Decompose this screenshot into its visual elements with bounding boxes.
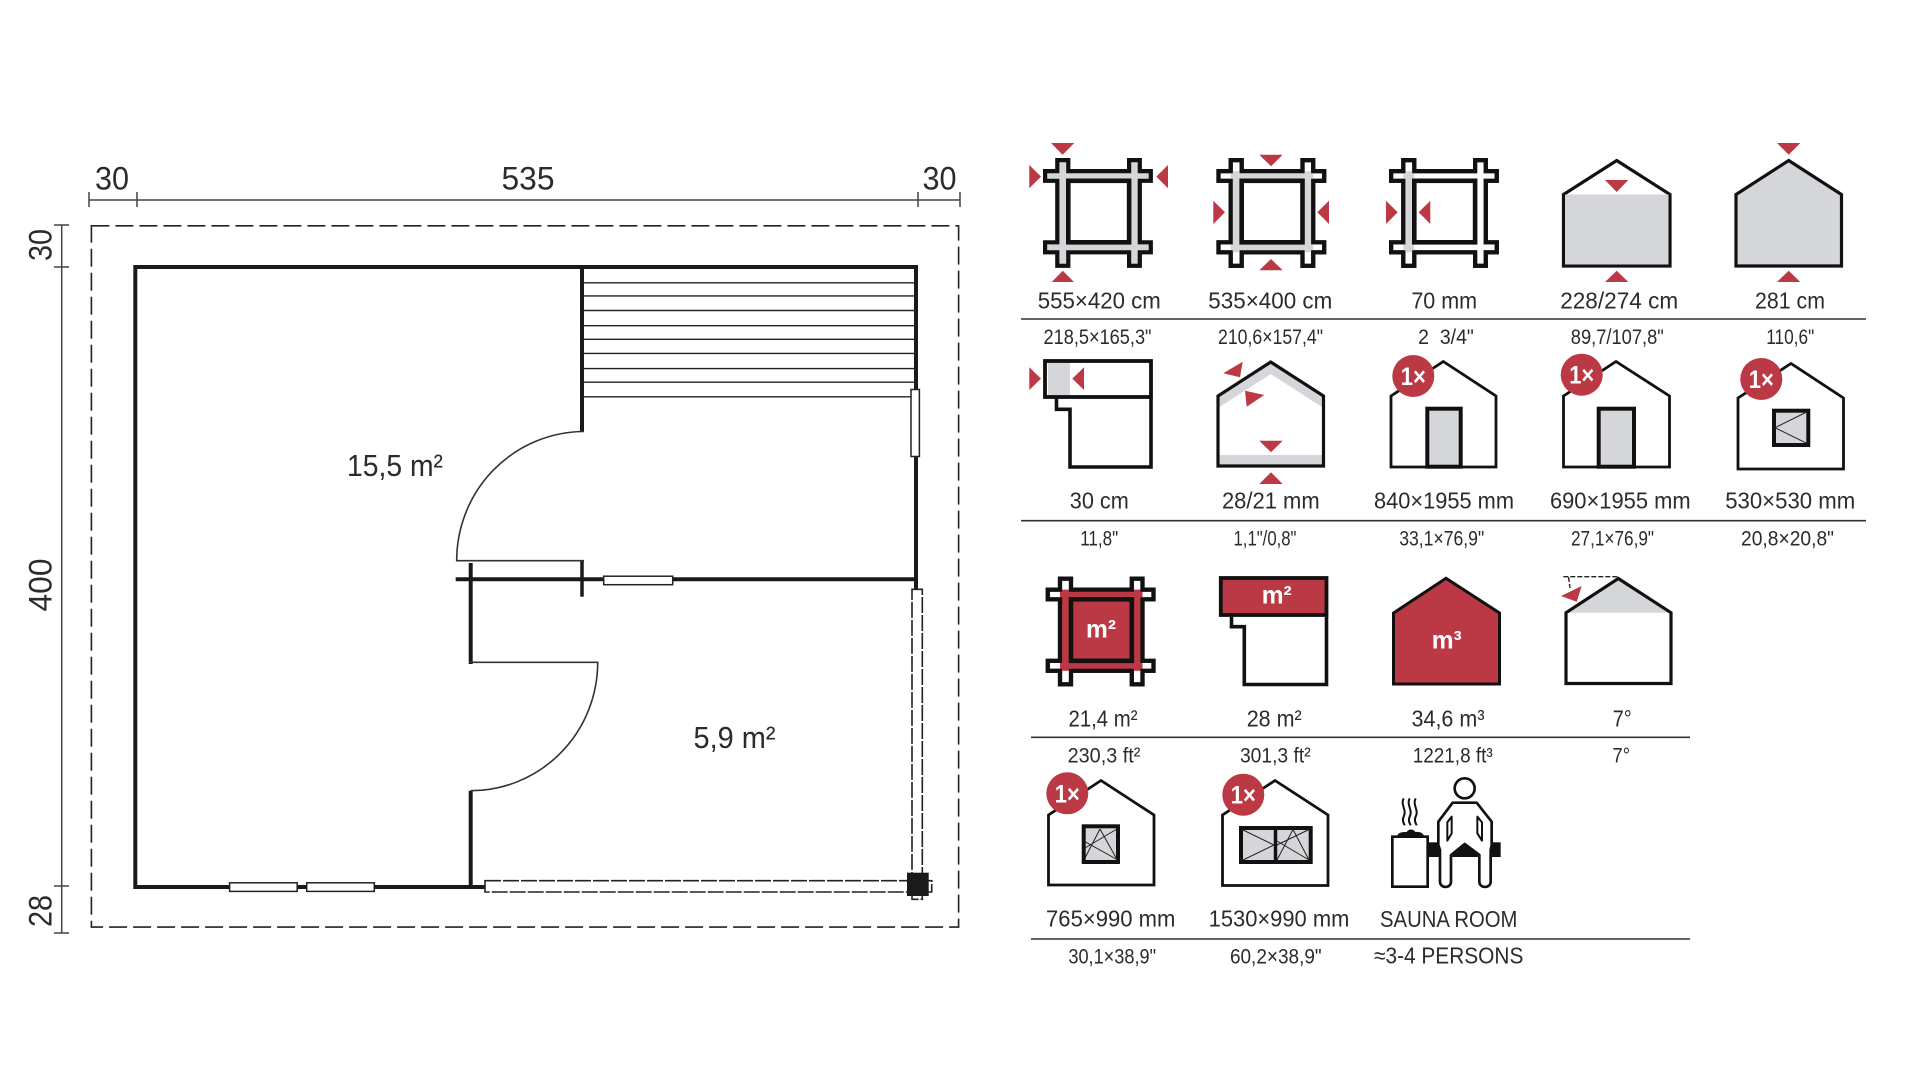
icon: total height xyxy=(1736,143,1842,282)
bottom window 1 xyxy=(230,883,297,891)
sublabel: inches: 89,7/107,8" xyxy=(1571,326,1664,349)
label: 228/274 cm: 228/274 cm xyxy=(1560,288,1678,314)
icon: tilt window: 1× xyxy=(1055,780,1080,808)
sublabel: 7 degrees: 7° xyxy=(1613,744,1630,768)
sublabel: inches: 218,5×165,3" xyxy=(1044,326,1152,349)
door frame stub xyxy=(580,561,584,597)
arm gaps xyxy=(1447,817,1482,841)
row 3 rule xyxy=(1031,736,1690,738)
icon: interior height xyxy=(1564,160,1670,282)
label: 30 cm: 30 cm xyxy=(1070,488,1129,514)
middle wall xyxy=(456,577,916,581)
sublabel: inches: 60,2×38,9" xyxy=(1230,946,1322,968)
icon: small window: 1× xyxy=(1749,366,1774,394)
icon: sauna door xyxy=(1561,354,1670,467)
changing room wall xyxy=(469,563,473,887)
sublabel: square feet: 301,3 ft² xyxy=(1240,744,1311,768)
side dimension line xyxy=(54,225,69,933)
sauna benches xyxy=(582,283,916,397)
label: 281 cm: 281 cm xyxy=(1755,288,1825,314)
label: 70 mm: 70 mm xyxy=(1411,288,1477,314)
icon: double window xyxy=(1222,774,1328,886)
icon: small window xyxy=(1738,358,1844,469)
sublabel: inches: 110,6" xyxy=(1766,326,1814,349)
label: 765x990 mm: 765×990 mm xyxy=(1046,906,1175,932)
label: 34,6 m3: 34,6 m³ xyxy=(1412,706,1485,732)
top dimension line xyxy=(89,192,960,207)
label: 28/21 mm: 28/21 mm xyxy=(1222,488,1320,514)
label: sauna room: SAUNA ROOM xyxy=(1380,906,1517,932)
label: 535x400 cm: 535×400 cm xyxy=(1208,288,1332,314)
label: 28 m2: 28 m² xyxy=(1247,706,1302,732)
sublabel: inches: 27,1×76,9" xyxy=(1571,528,1654,550)
dimension label: 30 left: 30 xyxy=(95,160,129,196)
dashed terrace edge: right xyxy=(912,589,922,899)
sublabel: square feet: 230,3 ft² xyxy=(1068,744,1140,768)
label: 530x530 mm: 530×530 mm xyxy=(1725,488,1855,514)
row 2 rule xyxy=(1021,520,1866,522)
person head xyxy=(1455,778,1475,798)
icon: roof and floor thickness xyxy=(1218,362,1324,484)
icon: sauna door: 1× xyxy=(1569,362,1594,390)
sublabel: inches: 1,1"/0,8" xyxy=(1234,528,1296,550)
sublabel: inches: 2 3/4" xyxy=(1418,326,1474,349)
window in right wall xyxy=(911,390,919,456)
icon: double window: 1× xyxy=(1231,782,1256,810)
icon: roof pitch xyxy=(1561,577,1671,684)
sublabel: inches: 30,1×38,9" xyxy=(1068,946,1156,968)
icon: sauna room with person and heater xyxy=(1392,778,1501,887)
row 4 rule xyxy=(1031,938,1690,940)
icon: roof area: m² xyxy=(1262,581,1292,609)
outer walls xyxy=(135,267,916,887)
sublabel: inches: 20,8×20,8" xyxy=(1741,528,1834,550)
sublabel: inches: 210,6×157,4" xyxy=(1218,326,1323,349)
sauna partition wall xyxy=(580,267,584,431)
heater xyxy=(1392,837,1428,887)
icon: external footprint xyxy=(1029,143,1168,282)
label: 7 degrees: 7° xyxy=(1613,706,1632,732)
dimension label: 535: 535 xyxy=(502,160,554,196)
room area: 15,5 m2: 15,5 m² xyxy=(347,448,443,483)
dimension label: 400 side: 400 xyxy=(22,558,58,612)
corner post xyxy=(907,873,929,896)
room area: 5,9 m2: 5,9 m² xyxy=(694,720,776,755)
label: 1530x990 mm: 1530×990 mm xyxy=(1209,906,1349,932)
icon: volume xyxy=(1394,578,1500,684)
icon: floor area: m² xyxy=(1086,616,1116,644)
icon: volume: m³ xyxy=(1432,626,1462,654)
sublabel: inches: 33,1×76,9" xyxy=(1399,528,1484,550)
roof overhang dashed outline xyxy=(91,226,959,927)
icon: wall centre footprint xyxy=(1213,155,1329,270)
sauna door swing xyxy=(457,432,584,561)
label: 555x420 cm: 555×420 cm xyxy=(1038,288,1161,314)
person body xyxy=(1438,803,1492,887)
icon: main door xyxy=(1391,355,1496,467)
dashed terrace edge: bottom xyxy=(485,881,932,892)
sublabel: inches: 11,8" xyxy=(1080,528,1118,550)
icon: wall thickness xyxy=(1386,160,1497,266)
label: 21,4 m2: 21,4 m² xyxy=(1068,706,1138,732)
icon: main door: 1× xyxy=(1401,363,1426,391)
window in middle wall xyxy=(604,576,673,585)
entry door swing xyxy=(469,662,598,791)
dimension label: 30 side: 30 xyxy=(22,229,58,261)
label: 690x1955 mm: 690×1955 mm xyxy=(1550,488,1691,514)
bench xyxy=(1427,842,1501,857)
dimension label: 28 side: 28 xyxy=(22,895,58,927)
heater stones xyxy=(1397,829,1424,837)
label: 840x1955 mm: 840×1955 mm xyxy=(1374,488,1514,514)
bottom window 2 xyxy=(307,883,374,891)
icon: roof area xyxy=(1221,578,1326,684)
steam xyxy=(1403,798,1417,825)
icon: floor area xyxy=(1048,579,1154,684)
icon: roof overhang xyxy=(1029,361,1151,467)
sublabel: persons: ≈3-4 PERSONS xyxy=(1374,942,1523,968)
dimension label: 30 right: 30 xyxy=(922,160,956,196)
icon: tilt window xyxy=(1046,772,1154,885)
panel: specification icons xyxy=(1021,143,1866,968)
sublabel: cubic feet: 1221,8 ft³ xyxy=(1413,744,1493,768)
panel: floor plan xyxy=(22,160,960,933)
row 1 rule xyxy=(1021,318,1866,320)
